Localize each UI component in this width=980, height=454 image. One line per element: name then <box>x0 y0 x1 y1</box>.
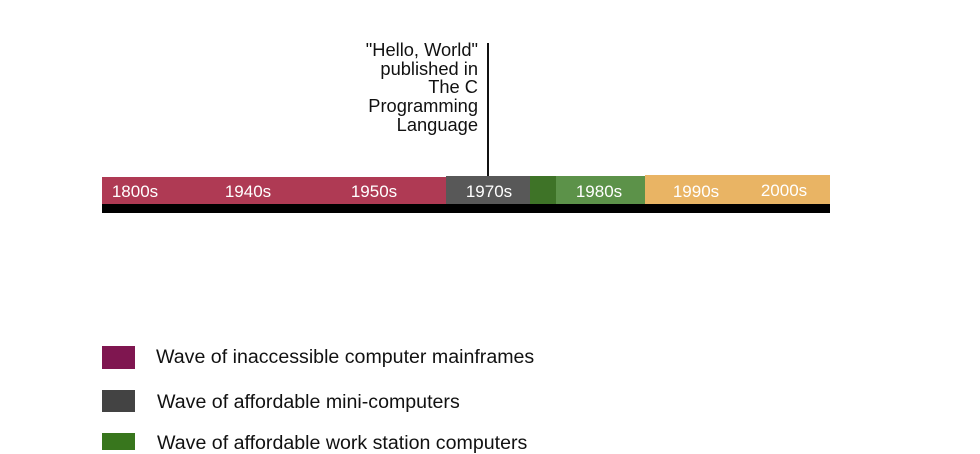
timeline baseline <box>102 204 830 213</box>
annotation stem line <box>487 43 489 177</box>
label: 1940s: 1940s <box>225 182 271 201</box>
segment: mini-computers <box>446 176 530 204</box>
annotation: Hello World: The C <box>428 76 478 97</box>
label: 1800s: 1800s <box>112 182 158 201</box>
legend text: mainframes: Wave of inaccessible computer mainframes <box>156 346 534 368</box>
segment: overlap mini and work station <box>530 176 556 204</box>
label: 1950s: 1950s <box>351 182 397 201</box>
segment: mainframes <box>102 177 446 204</box>
segment: 1990s-2000s <box>645 175 830 204</box>
annotation: Hello World: Programming <box>368 95 478 116</box>
label: 1970s: 1970s <box>466 182 512 201</box>
legend swatch: work stations <box>102 433 135 450</box>
annotation: Hello World: "Hello, World" <box>366 39 478 60</box>
label: 2000s: 2000s <box>761 181 807 200</box>
legend text: mini-computers: Wave of affordable mini-computers <box>157 391 460 413</box>
annotation: Hello World: Language <box>397 114 478 135</box>
legend swatch: mainframes <box>102 346 135 369</box>
label: 1980s: 1980s <box>576 182 622 201</box>
annotation: Hello World: published in <box>380 58 478 79</box>
segment: work station <box>556 176 646 204</box>
legend swatch: mini-computers <box>102 390 135 412</box>
label: 1990s: 1990s <box>673 182 719 201</box>
legend text: work stations: Wave of affordable work station computers <box>157 432 527 454</box>
annotation: Hello World <box>366 39 478 135</box>
